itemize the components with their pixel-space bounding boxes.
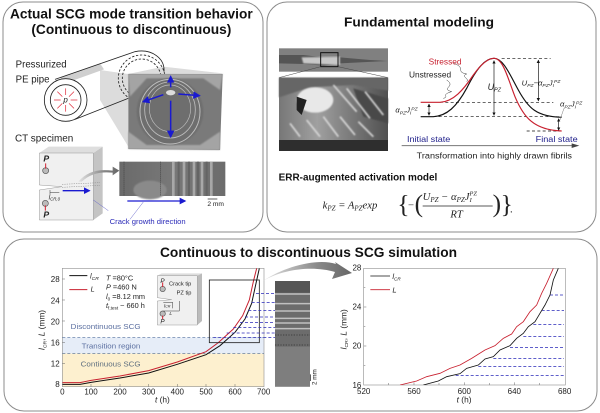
y axis title: , bbox=[338, 336, 348, 340]
chart: full lifetime simulation: 8 bbox=[55, 380, 60, 389]
legend and test conditions: L bbox=[91, 285, 95, 294]
axis tick labels: 520 bbox=[357, 387, 371, 396]
chart: full lifetime simulation bbox=[37, 268, 275, 404]
labels: energy diagram: I bbox=[410, 110, 412, 116]
axis tick labels: 500 bbox=[199, 387, 213, 396]
image: fracture strip bbox=[275, 281, 310, 387]
title: Actual SCG mode transition behavior bbox=[10, 5, 253, 21]
labels: energy diagram: J bbox=[405, 106, 410, 115]
arrow: gray curved arrow bbox=[78, 167, 119, 182]
labels: energy diagram: PZ bbox=[542, 83, 550, 89]
formula: I bbox=[469, 197, 473, 204]
icon: CT specimen inset: PZ tip bbox=[177, 290, 191, 296]
y axis title: L (mm) bbox=[338, 309, 348, 336]
zoom box bbox=[209, 280, 259, 343]
heading: ERR-augmented activation model: ERR-augmented activation model bbox=[279, 172, 437, 183]
icon: CT specimen block: P bbox=[43, 153, 49, 163]
chart: full lifetime simulation: Continuous SCG bbox=[81, 360, 141, 369]
labels: energy diagram: U bbox=[488, 82, 494, 92]
label: pressurized PE pipe: Pressurized bbox=[16, 60, 67, 71]
labels: energy diagram: U bbox=[522, 78, 527, 87]
x axis title: t (h) bbox=[457, 394, 472, 404]
chart: zoomed simulation bbox=[338, 264, 572, 404]
formula: ( bbox=[415, 190, 423, 218]
label: crack growth direction bbox=[93, 200, 186, 226]
legend and test conditions: CR bbox=[92, 276, 99, 282]
legend and test conditions: =8.12 mm bbox=[110, 292, 145, 301]
labels: energy diagram: −α bbox=[534, 78, 543, 87]
label: final state: Final state bbox=[536, 134, 578, 144]
labels: energy diagram: Unstressed bbox=[409, 69, 451, 79]
label: crack growth direction: Crack growth direction bbox=[110, 217, 186, 226]
labels: energy diagram: I bbox=[575, 104, 577, 110]
legend and test conditions: ~ 660 h bbox=[118, 301, 145, 310]
chart: full lifetime simulation: 12 bbox=[51, 359, 60, 368]
axis tick labels: 300 bbox=[142, 387, 156, 396]
formula: PZ bbox=[456, 196, 465, 204]
y axis title: CR bbox=[42, 341, 48, 348]
panel: fundamental modeling bbox=[267, 2, 596, 232]
formula: { bbox=[397, 190, 410, 218]
formula: . bbox=[510, 205, 513, 216]
chart: full lifetime simulation: 24 bbox=[51, 296, 60, 305]
axis tick labels bbox=[60, 387, 271, 396]
axis tick labels: 600 bbox=[228, 387, 242, 396]
icon: CT specimen inset: P bbox=[160, 278, 165, 285]
image: fracture surface with blue arrows bbox=[128, 74, 223, 150]
icon: CT specimen block: l bbox=[49, 194, 50, 201]
panel: actual SCG mode transition behavior bbox=[3, 2, 263, 232]
scale bar: 2 mm vertical: 2 mm bbox=[312, 369, 319, 385]
legend: l bbox=[392, 272, 394, 281]
axis tick labels: 640 bbox=[508, 387, 522, 396]
formula: PZ bbox=[326, 204, 336, 212]
formula bbox=[323, 190, 513, 220]
formula: − α bbox=[439, 192, 457, 203]
y axis title: L (mm) bbox=[37, 310, 47, 336]
labels: energy diagram: PZ bbox=[494, 88, 502, 94]
labels: energy diagram: J bbox=[570, 100, 575, 109]
axis tick labels: 560 bbox=[407, 387, 421, 396]
labels: energy diagram: PZ bbox=[554, 79, 561, 85]
label: pressurized PE pipe: PE pipe bbox=[16, 74, 49, 85]
labels: energy diagram: PZ bbox=[564, 104, 572, 110]
title: Continuous to discontinuous SCG simulation bbox=[160, 244, 457, 260]
label: internal pressure: p bbox=[62, 96, 68, 105]
legend and test conditions: t bbox=[106, 301, 109, 310]
icon: CT specimen inset bbox=[157, 273, 202, 326]
labels: energy diagram: J bbox=[548, 78, 553, 87]
image: CT fracture strip bbox=[119, 162, 225, 199]
labels: energy diagram: Stressed bbox=[429, 57, 462, 67]
chart: zoomed simulation: 28 bbox=[352, 264, 362, 273]
chart: zoomed simulation: 20 bbox=[352, 342, 362, 351]
chart: zoomed simulation: 24 bbox=[352, 303, 362, 312]
icon: CT specimen block bbox=[39, 147, 103, 220]
arrow: transformation axis bbox=[402, 143, 579, 148]
icon: CT specimen inset: Crack tip bbox=[169, 281, 191, 287]
panel: continuous to discontinuous SCG simulation bbox=[4, 239, 597, 411]
legend bbox=[370, 272, 401, 294]
axis tick labels: 0 bbox=[60, 387, 65, 396]
icon: CT specimen inset: lCR bbox=[164, 304, 171, 310]
legend: CR bbox=[394, 277, 401, 282]
formula: J bbox=[465, 192, 471, 203]
icon: CT specimen block: CR,0 bbox=[50, 196, 61, 201]
chart: full lifetime simulation: 28 bbox=[51, 275, 60, 284]
legend and test conditions: 0 bbox=[108, 296, 111, 301]
formula: RT bbox=[449, 209, 464, 220]
arrow: gray curved zoom arrow bbox=[263, 262, 352, 281]
formula: U bbox=[423, 192, 430, 203]
scale bar: 2 mm: 2 mm bbox=[207, 201, 224, 208]
chart: zoomed simulation: 16 bbox=[352, 381, 362, 390]
arrow: crack growth in strip bbox=[127, 199, 185, 203]
formula: exp bbox=[363, 200, 377, 211]
label: CT specimen: CT specimen bbox=[15, 133, 73, 144]
axis tick labels bbox=[357, 387, 572, 396]
legend and test conditions: l bbox=[106, 292, 108, 301]
chart: full lifetime simulation: 16 bbox=[51, 338, 60, 347]
axis tick labels: 100 bbox=[84, 387, 98, 396]
labels: energy diagram: PZ bbox=[527, 83, 535, 89]
formula: = A bbox=[336, 200, 355, 211]
chart: full lifetime simulation: Discontinuous SCG bbox=[71, 322, 141, 331]
labels: energy diagram: I bbox=[553, 83, 555, 89]
axis tick labels: 400 bbox=[171, 387, 185, 396]
legend and test conditions: P =460 N bbox=[106, 283, 137, 292]
legend and test conditions: f,test bbox=[108, 305, 119, 310]
formula: } bbox=[501, 190, 513, 218]
label: transformation caption: Transformation into highly drawn fibrils bbox=[417, 150, 572, 160]
y axis title: l bbox=[37, 347, 47, 350]
axis tick labels: 700 bbox=[257, 387, 271, 396]
formula: − bbox=[408, 200, 414, 211]
legend: L bbox=[392, 285, 397, 294]
y axis title: , bbox=[37, 336, 47, 341]
formula: PZ bbox=[353, 204, 363, 212]
labels: energy diagram: PZ bbox=[400, 110, 407, 116]
title bbox=[10, 5, 253, 37]
formula: PZ bbox=[429, 196, 439, 204]
labels: energy diagram bbox=[395, 57, 583, 116]
legend and test conditions bbox=[69, 271, 145, 310]
y axis title: l bbox=[338, 346, 348, 349]
axis tick labels: 600 bbox=[458, 387, 472, 396]
dashed transition levels bbox=[213, 293, 275, 338]
labels: energy diagram: PZ bbox=[411, 106, 419, 112]
icon: CT specimen inset: P bbox=[160, 319, 165, 326]
formula: k bbox=[323, 200, 327, 211]
formula: ) bbox=[493, 190, 501, 218]
labels: energy diagram: α bbox=[560, 100, 564, 109]
icon: pressurized pipe diagram bbox=[44, 51, 223, 147]
image: SEM micrographs bbox=[279, 48, 388, 151]
label: initial state: Initial state bbox=[407, 134, 451, 144]
legend and test conditions: T =80°C bbox=[106, 273, 134, 282]
formula: PZ bbox=[469, 190, 477, 197]
chart: full lifetime simulation: Transition region bbox=[82, 341, 140, 350]
chart: energy barrier diagram bbox=[421, 58, 564, 131]
title: Fundamental modeling bbox=[344, 15, 494, 29]
legend and test conditions: l bbox=[90, 271, 92, 280]
labels: energy diagram: PZ bbox=[576, 100, 583, 106]
axis tick labels: 680 bbox=[558, 387, 572, 396]
icon: CT specimen inset: L bbox=[169, 311, 172, 317]
chart: full lifetime simulation: 20 bbox=[51, 317, 60, 326]
labels: energy diagram: α bbox=[395, 106, 400, 115]
axis tick labels: 200 bbox=[113, 387, 127, 396]
x axis title: t (h) bbox=[155, 394, 170, 404]
y axis title: CR bbox=[344, 340, 350, 347]
title: (Continuous to discontinuous) bbox=[31, 21, 231, 37]
icon: CT specimen block: P bbox=[43, 209, 49, 219]
